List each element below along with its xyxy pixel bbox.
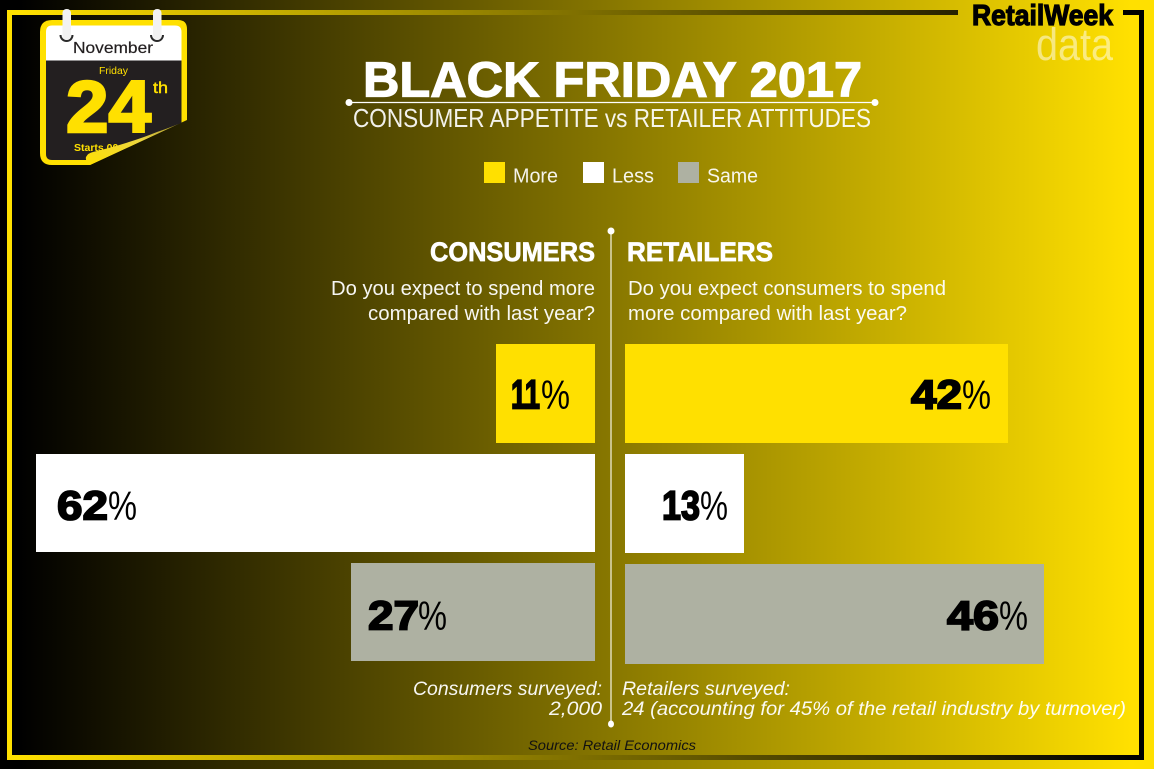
bar: consumers same 27%: [351, 563, 595, 661]
question: retailers: [628, 278, 946, 325]
bar: retailers same 46%: %: [999, 593, 1028, 639]
question: retailers: Do you expect consumers to spend: [628, 278, 946, 300]
calendar page curl: [86, 120, 187, 165]
bar: consumers less 62%: %: [108, 483, 137, 529]
calendar rings: [60, 9, 163, 41]
bar: retailers more 42%: [625, 344, 1008, 443]
legend: [484, 162, 758, 188]
bar: consumers more 11%: 11: [511, 372, 540, 418]
bar: retailers same 46%: 46: [947, 592, 999, 638]
note: consumers surveyed: Consumers surveyed:: [413, 678, 602, 700]
logo: Retail Week data: RetailWeek: [972, 0, 1114, 32]
calendar date: 24: [66, 67, 151, 148]
bar: retailers more 42%: 42: [911, 372, 962, 418]
bar: retailers less 13%: %: [700, 483, 728, 529]
bar: retailers less 13%: 13: [662, 482, 700, 528]
bar: consumers same 27%: %: [418, 593, 447, 639]
bar: consumers less 62%: 62: [57, 482, 108, 528]
note: retailers surveyed: Retailers surveyed:: [622, 678, 790, 700]
logo: Retail Week data: data: [1036, 19, 1114, 70]
title: BLACK FRIDAY 2017: [363, 54, 862, 108]
source: Source: Retail Economics: [528, 737, 696, 753]
center divider: [608, 228, 614, 728]
calendar footer: Starts 00: [74, 142, 119, 154]
bar: consumers more 11%: %: [541, 372, 570, 418]
panel: retailers: [621, 237, 1126, 720]
legend: More: [513, 166, 558, 188]
question: retailers: more compared with last year?: [628, 303, 907, 325]
bar: retailers same 46%: [625, 564, 1044, 664]
calendar suffix: th: [153, 80, 168, 97]
bar: consumers more 11%: [496, 344, 595, 443]
bar: consumers same 27%: 27: [368, 592, 419, 638]
bar: retailers more 42%: %: [962, 372, 991, 418]
bar: retailers less 13%: [625, 454, 744, 553]
panel: consumers: [36, 237, 602, 720]
note: consumers surveyed: [413, 678, 602, 720]
icon: calendar: [40, 9, 187, 165]
question: consumers: [331, 278, 595, 325]
question: consumers: Do you expect to spend more: [331, 278, 595, 300]
bar: consumers less 62%: [36, 454, 595, 552]
title rule: [349, 102, 875, 104]
heading: retailers: RETAILERS: [627, 237, 773, 267]
note: retailers surveyed: 24 (accounting for 45% of the retail industry by turnover): [621, 698, 1126, 720]
note: retailers surveyed: [621, 678, 1126, 720]
legend: Same: [707, 166, 758, 188]
question: consumers: compared with last year?: [368, 303, 595, 325]
note: consumers surveyed: 2,000: [548, 698, 602, 720]
subtitle: CONSUMER APPETITE vs RETAILER ATTITUDES: [353, 103, 871, 133]
heading: consumers: CONSUMERS: [430, 237, 595, 267]
logo: Retail Week data: [972, 0, 1114, 70]
calendar weekday: Friday: [99, 66, 128, 77]
calendar month: November: [73, 40, 154, 57]
legend: Less: [612, 166, 654, 188]
title: [346, 54, 878, 133]
